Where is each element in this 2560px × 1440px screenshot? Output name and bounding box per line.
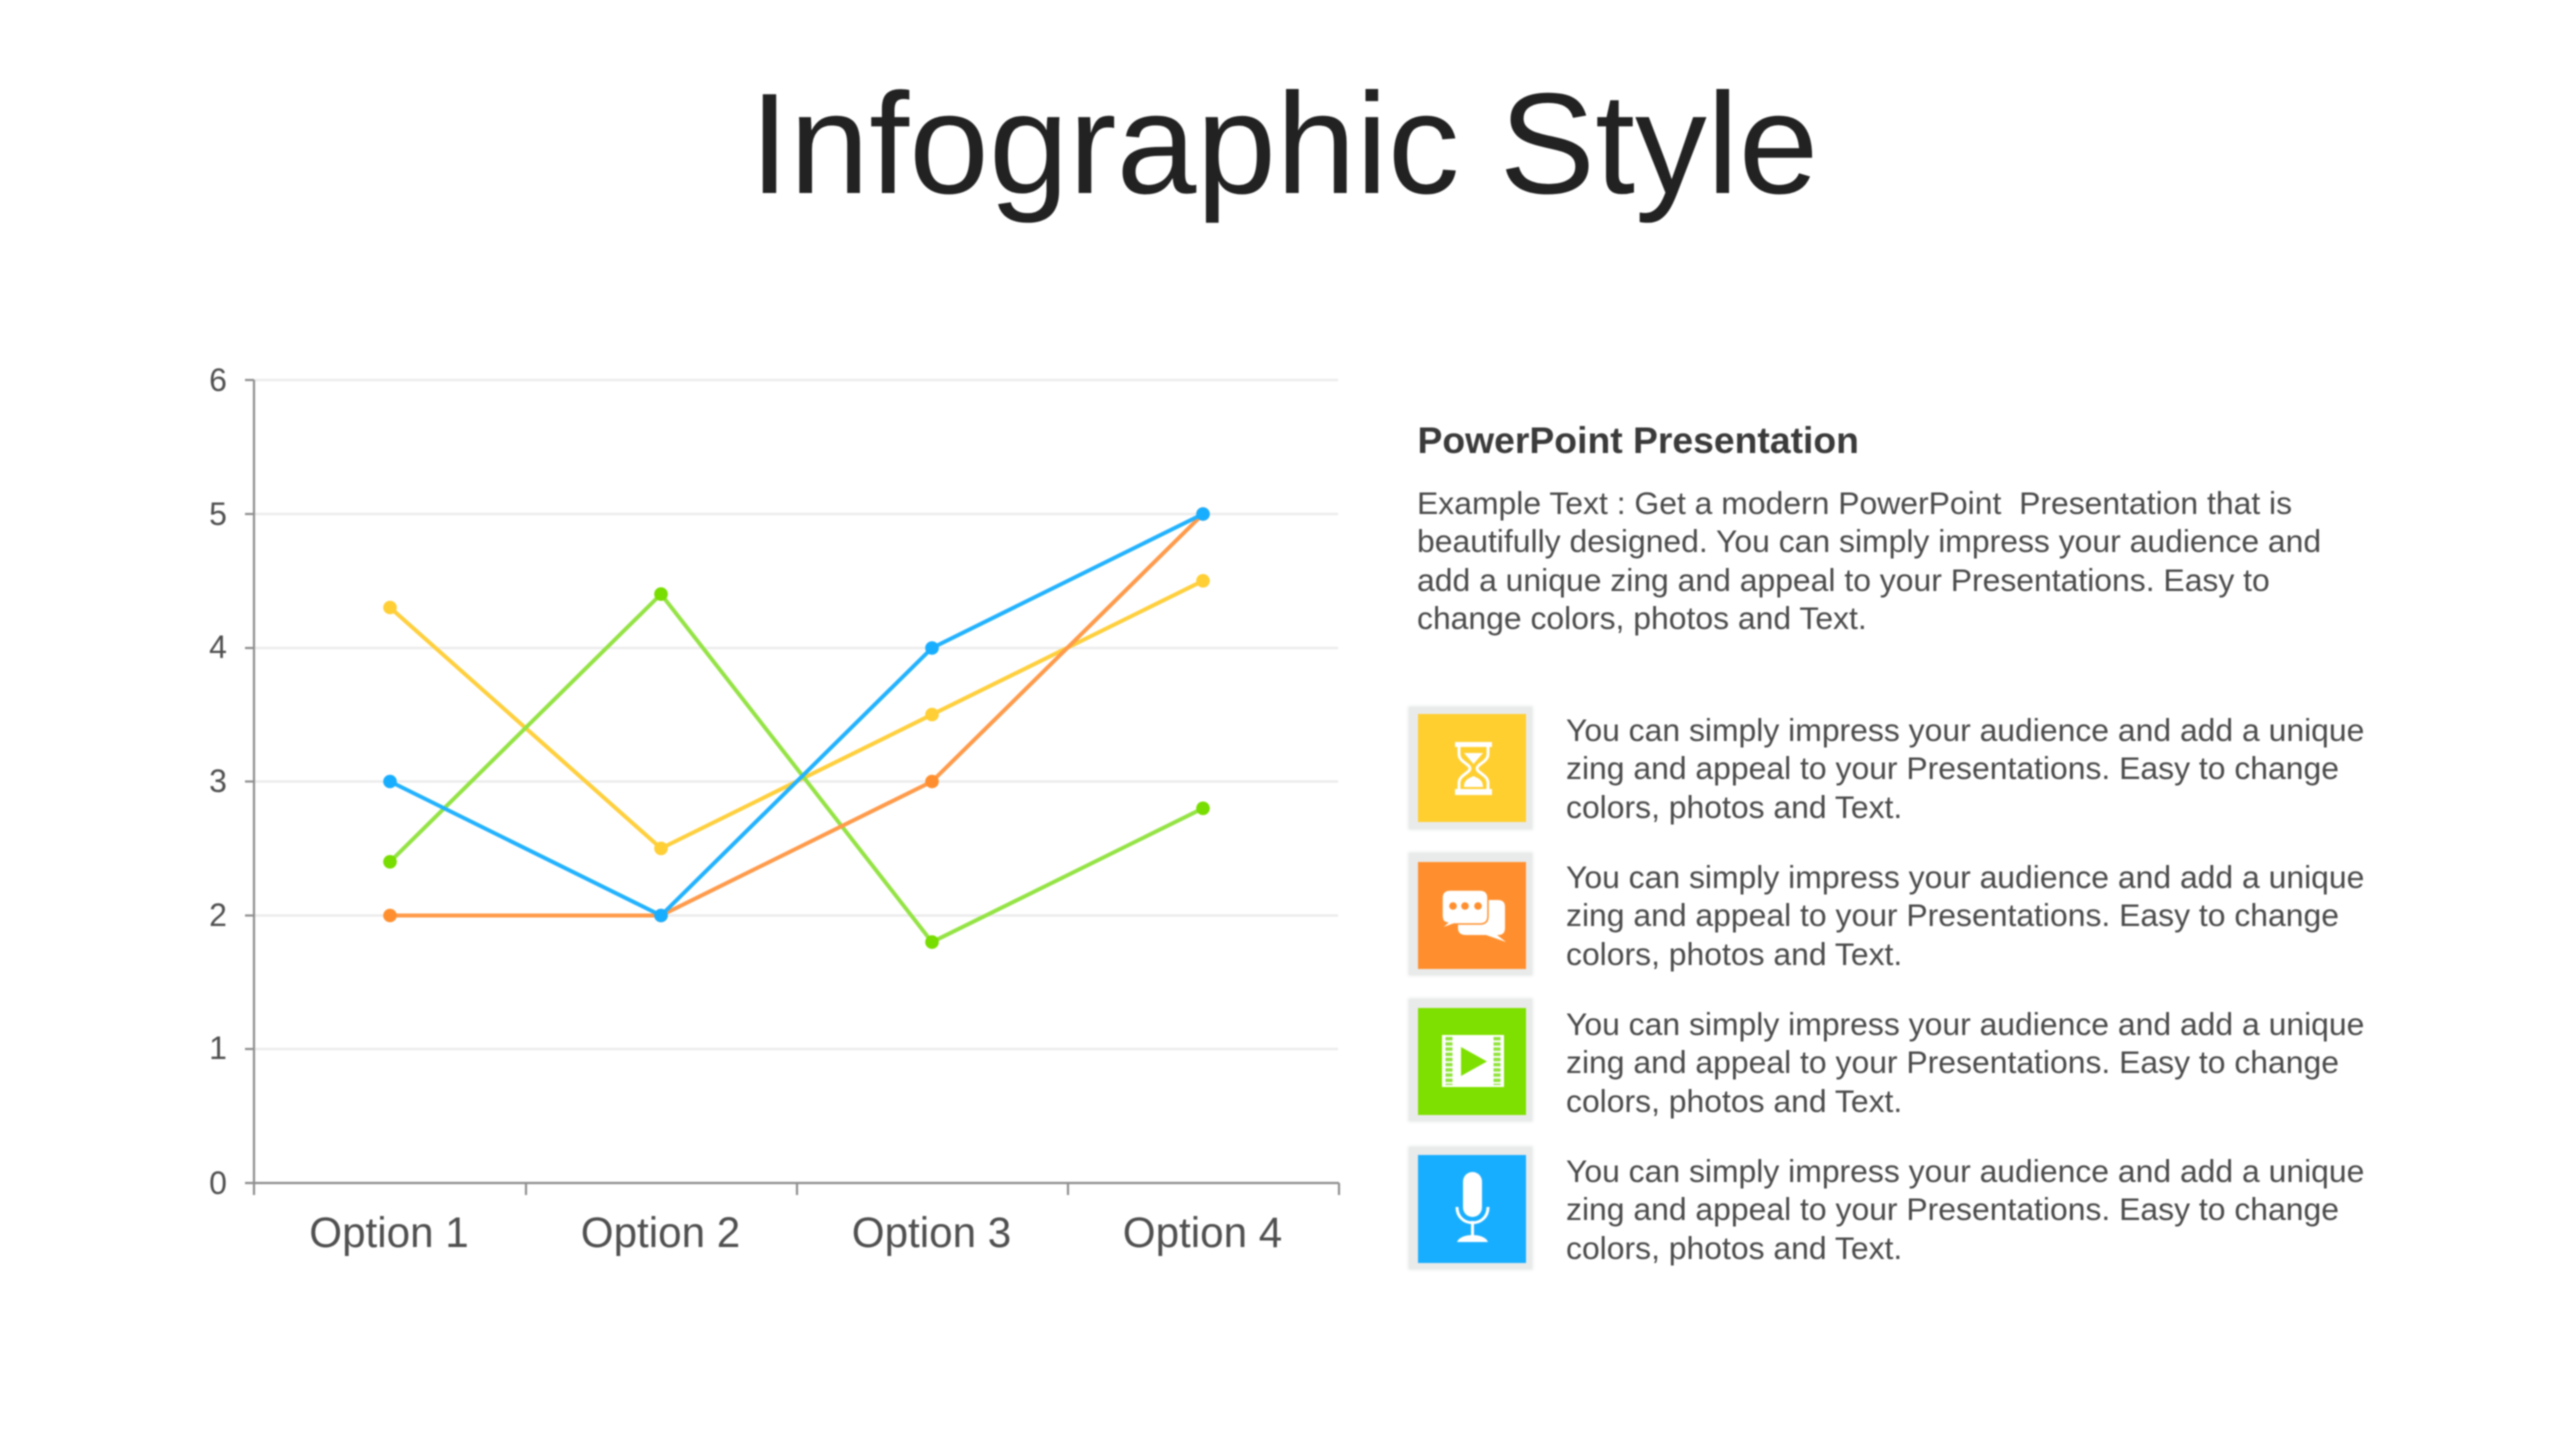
icon: chat bubbles on orange tile xyxy=(1409,853,1532,975)
x axis labels xyxy=(309,1209,1282,1256)
icon: microphone on blue tile xyxy=(1409,1147,1532,1269)
y axis labels xyxy=(209,362,227,1201)
series: orange line xyxy=(383,507,1210,922)
y axis labels: 0 xyxy=(209,1165,227,1201)
title: Infographic Style xyxy=(750,64,1818,224)
series: green line xyxy=(383,587,1210,949)
icon: hourglass on yellow tile xyxy=(1409,707,1532,829)
intro text block: Example Text : Get a modern PowerPoint Presentation that is xyxy=(1417,485,2292,521)
icon: film play on green tile xyxy=(1409,999,1532,1121)
x axis labels: Option 2 xyxy=(581,1209,740,1256)
x axis labels: Option 4 xyxy=(1123,1209,1282,1256)
item text 2: zing and appeal to your Presentations. Easy to change xyxy=(1566,897,2339,933)
y axis labels: 3 xyxy=(209,763,227,799)
y axis labels: 6 xyxy=(209,362,227,398)
intro text block xyxy=(1417,485,2321,636)
x axis labels: Option 3 xyxy=(852,1209,1011,1256)
item text 3: colors, photos and Text. xyxy=(1566,1083,1902,1119)
item text 1 xyxy=(1566,712,2364,826)
item text 4 xyxy=(1566,1153,2364,1266)
y axis labels: 4 xyxy=(209,629,227,665)
item text 1: colors, photos and Text. xyxy=(1566,789,1902,825)
item text 2: colors, photos and Text. xyxy=(1566,936,1902,972)
line chart xyxy=(208,362,1341,1257)
item text 4: You can simply impress your audience and add a unique xyxy=(1566,1153,2364,1189)
item text 4: zing and appeal to your Presentations. Easy to change xyxy=(1566,1191,2339,1227)
series: blue line xyxy=(383,507,1210,922)
intro text block: change colors, photos and Text. xyxy=(1417,600,1867,636)
item text 1: zing and appeal to your Presentations. Easy to change xyxy=(1566,750,2339,786)
gridlines xyxy=(254,380,1338,1049)
item text 2 xyxy=(1566,859,2364,972)
item text 3: You can simply impress your audience and add a unique xyxy=(1566,1006,2364,1042)
y axis labels: 1 xyxy=(209,1030,227,1066)
item text 3: zing and appeal to your Presentations. Easy to change xyxy=(1566,1044,2339,1080)
y axis labels: 5 xyxy=(209,496,227,532)
y axis labels: 2 xyxy=(209,897,227,933)
x axis labels: Option 1 xyxy=(309,1209,469,1256)
item text 4: colors, photos and Text. xyxy=(1566,1230,1902,1266)
item text 3 xyxy=(1566,1006,2364,1120)
series: yellow line xyxy=(383,574,1210,855)
item text 2: You can simply impress your audience and add a unique xyxy=(1566,859,2364,895)
item text 1: You can simply impress your audience and add a unique xyxy=(1566,712,2364,748)
heading: PowerPoint Presentation xyxy=(1418,419,1859,461)
intro text block: add a unique zing and appeal to your Presentations. Easy to xyxy=(1417,562,2270,598)
intro text block: beautifully designed. You can simply impress your audience and xyxy=(1417,523,2321,559)
axes and tick marks xyxy=(245,380,1339,1195)
